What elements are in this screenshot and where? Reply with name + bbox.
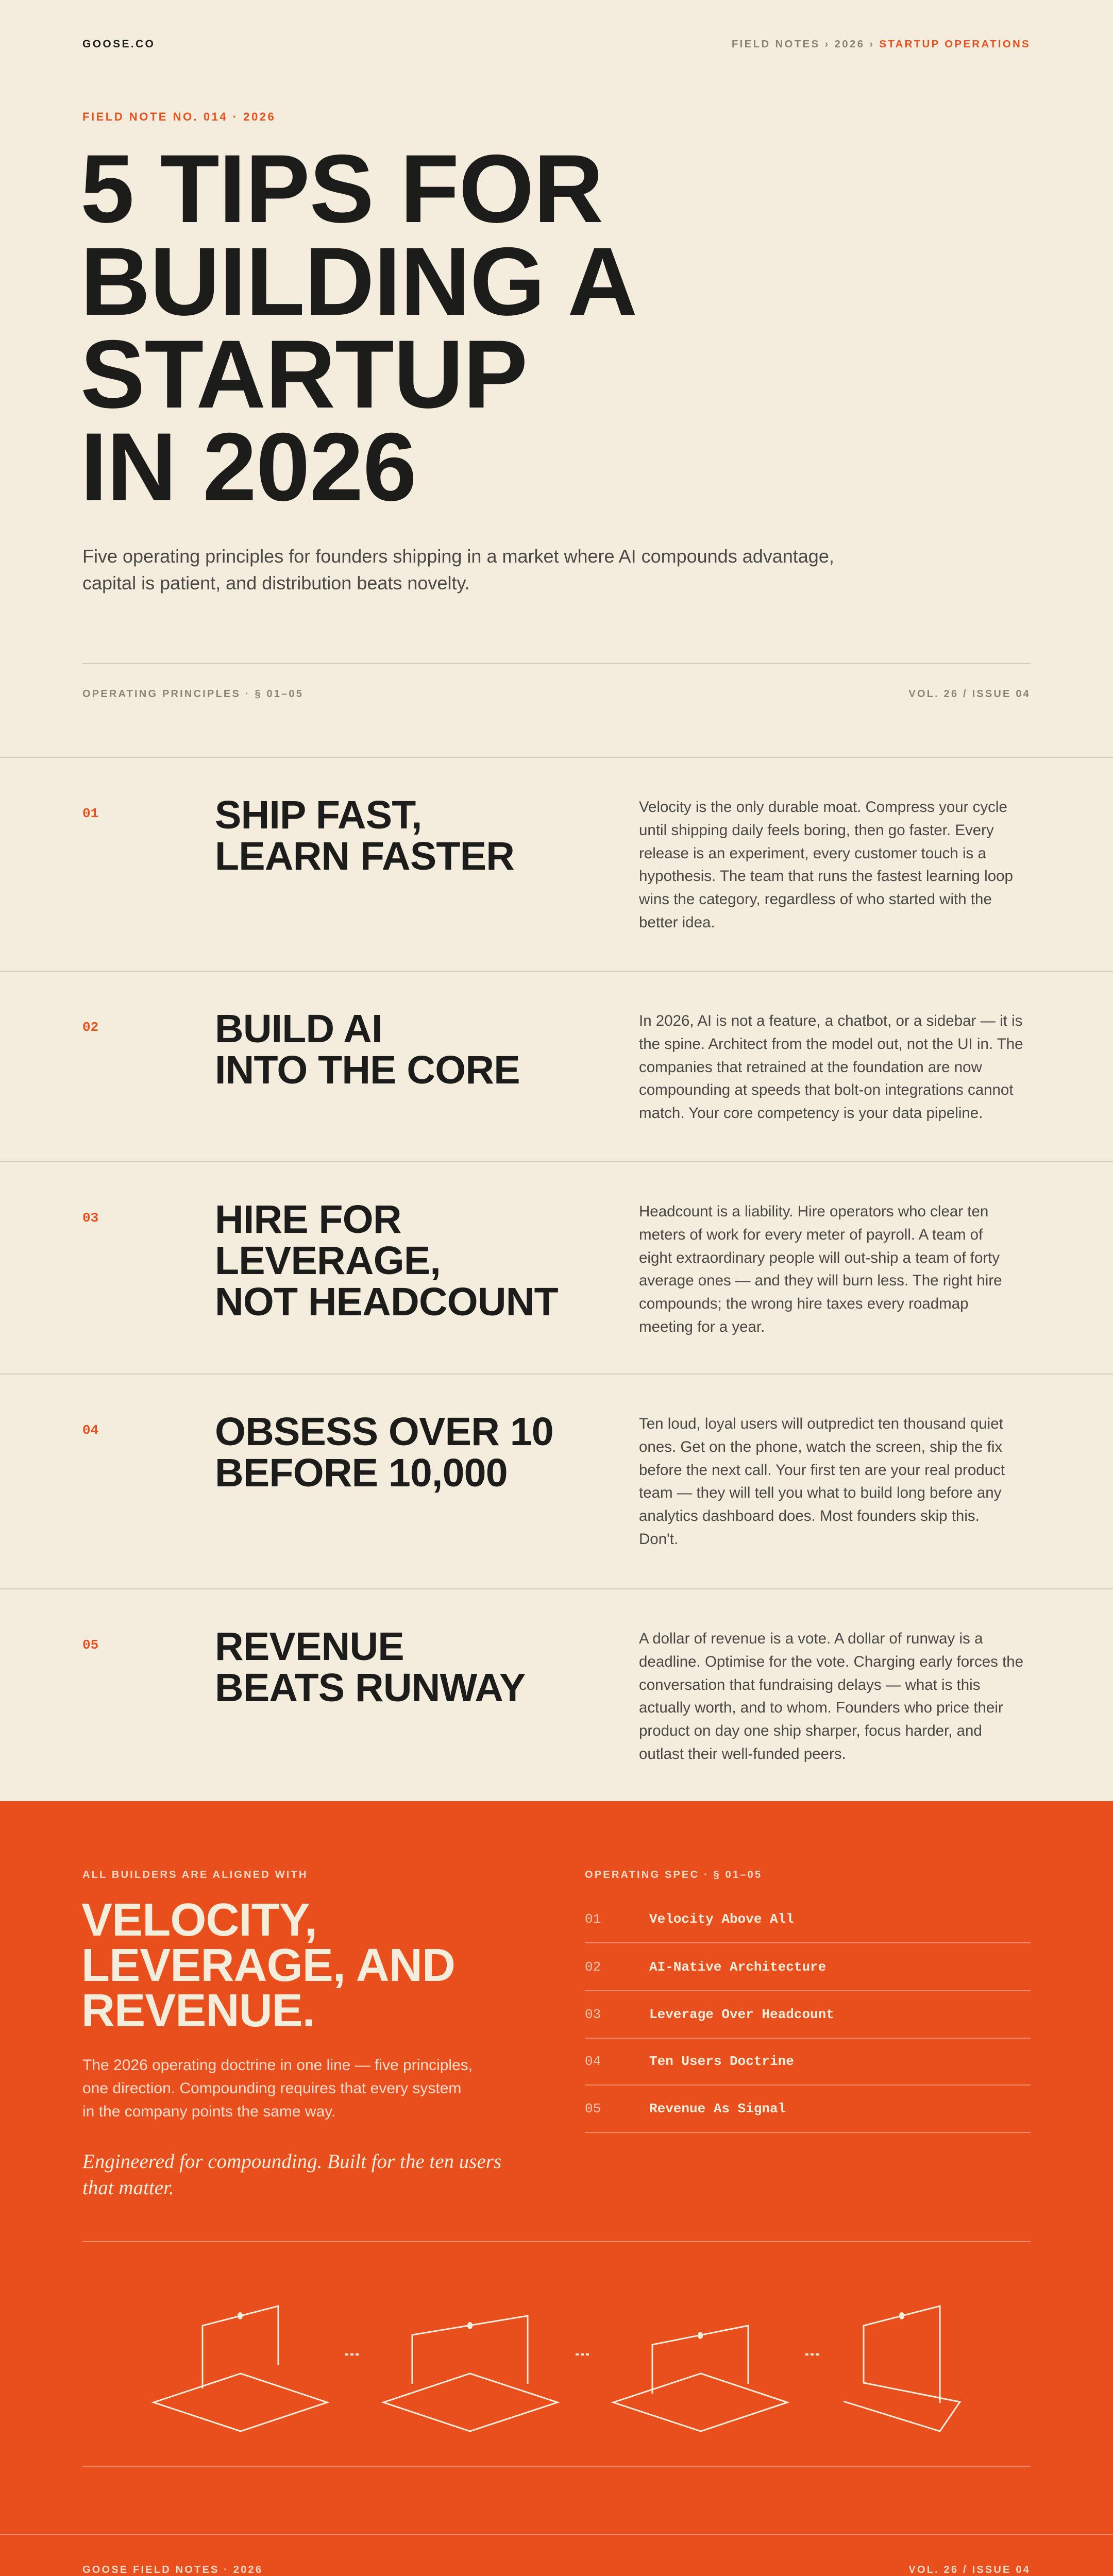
doctrine paragraph: The 2026 operating doctrine in one line — five principles, bbox=[82, 2057, 473, 2074]
number 01: 01 bbox=[82, 806, 98, 821]
body 02: compounding at speeds that bolt-on integrations cannot bbox=[639, 1081, 1014, 1098]
headline 03 bbox=[215, 1197, 558, 1324]
body 03: meters of work for every meter of payroll. A team of bbox=[639, 1226, 983, 1243]
number 03: 03 bbox=[82, 1210, 98, 1226]
spec 04: 04 bbox=[585, 2054, 601, 2069]
body 01: release is an experiment, every customer touch is a bbox=[639, 845, 986, 862]
title: IN 2026 bbox=[80, 413, 416, 521]
spec 02: 02 bbox=[585, 1959, 601, 1975]
spec 05: Revenue As Signal bbox=[649, 2101, 786, 2116]
body 01: hypothesis. The team that runs the fastest learning loop bbox=[639, 868, 1013, 885]
principle 04 bbox=[82, 1410, 1005, 1548]
headline 04 bbox=[215, 1410, 553, 1495]
body 01: wins the category, regardless of who started with the bbox=[639, 891, 992, 908]
principle 05 bbox=[82, 1624, 1023, 1762]
doctrine paragraph: in the company points the same way. bbox=[82, 2103, 335, 2120]
number 04: 04 bbox=[82, 1422, 98, 1438]
headline 01: LEARN FASTER bbox=[215, 834, 514, 878]
body 04: analytics dashboard does. Most founders skip this. bbox=[639, 1507, 980, 1524]
headline 01: SHIP FAST, bbox=[215, 793, 422, 837]
spec 01 bbox=[585, 1896, 1031, 1943]
eyebrow: all builders: ALL BUILDERS ARE ALIGNED WITH bbox=[82, 1869, 308, 1880]
spec 02: AI-Native Architecture bbox=[649, 1959, 826, 1975]
body 05: actually worth, and to whom. Founders who price their bbox=[639, 1699, 1003, 1716]
eyebrow: operating spec: OPERATING SPEC · § 01–05 bbox=[585, 1869, 762, 1880]
italic tagline: Engineered for compounding. Built for the ten users bbox=[82, 2150, 501, 2173]
eyebrow label: FIELD NOTE NO. 014 · 2026 bbox=[82, 110, 276, 123]
body 03: meeting for a year. bbox=[639, 1318, 765, 1335]
footer left: GOOSE FIELD NOTES · 2026 bbox=[82, 2564, 263, 2575]
panel figure 2 bbox=[383, 2316, 558, 2431]
spec 01: Velocity Above All bbox=[649, 1911, 794, 1927]
headline 02: BUILD AI bbox=[215, 1007, 382, 1051]
spec 05: 05 bbox=[585, 2101, 601, 2116]
body 02: companies that retrained at the foundation are now bbox=[639, 1059, 982, 1076]
panel: orange doctrine section bbox=[0, 1801, 1113, 2576]
headline 03: HIRE FOR bbox=[215, 1197, 401, 1242]
body 01: better idea. bbox=[639, 914, 715, 931]
body 03: Headcount is a liability. Hire operators who clear ten bbox=[639, 1203, 988, 1220]
title: 5 TIPS FOR bbox=[80, 134, 603, 243]
footer right: VOL. 26 / ISSUE 04 bbox=[908, 2564, 1031, 2575]
dots 2 bbox=[576, 2353, 589, 2355]
header: breadcrumb: FIELD NOTES › 2026 › STARTUP OPERATIONS bbox=[732, 38, 1031, 50]
principle 01 bbox=[82, 793, 1013, 931]
panel figure 3 bbox=[613, 2326, 787, 2431]
principle 02 bbox=[82, 1007, 1023, 1122]
doctrine paragraph bbox=[82, 2057, 473, 2120]
spec 03: Leverage Over Headcount bbox=[649, 2007, 834, 2022]
headline 02 bbox=[215, 1007, 520, 1092]
title: STARTUP bbox=[80, 320, 527, 428]
body 04 bbox=[639, 1415, 1005, 1548]
number 05: 05 bbox=[82, 1637, 98, 1653]
headline 02: INTO THE CORE bbox=[215, 1048, 520, 1092]
spec 03 bbox=[585, 1991, 1031, 2039]
doctrine paragraph: one direction. Compounding requires that every system bbox=[82, 2080, 461, 2097]
body 02: match. Your core competency is your data pipeline. bbox=[639, 1105, 983, 1122]
doctrine heading bbox=[81, 1894, 455, 2037]
body 04: before the next call. Your first ten are your real product bbox=[639, 1462, 1005, 1479]
headline 03: NOT HEADCOUNT bbox=[215, 1280, 558, 1324]
meta label left: OPERATING PRINCIPLES · § 01–05 bbox=[82, 688, 303, 700]
body 05 bbox=[639, 1630, 1023, 1762]
spec 02 bbox=[585, 1944, 1031, 1991]
body 01: until shipping daily feels boring, then go faster. Every bbox=[639, 822, 994, 839]
meta label right: VOL. 26 / ISSUE 04 bbox=[908, 688, 1031, 700]
headline 05: BEATS RUNWAY bbox=[215, 1666, 526, 1710]
body 04: team — they will tell you what to build long before any bbox=[639, 1484, 1001, 1501]
headline 01 bbox=[215, 793, 514, 878]
dots 1 bbox=[345, 2353, 359, 2355]
spec 04: Ten Users Doctrine bbox=[649, 2054, 794, 2069]
body 01 bbox=[639, 799, 1013, 931]
body 04: Ten loud, loyal users will outpredict ten thousand quiet bbox=[639, 1415, 1003, 1432]
body 04: Don't. bbox=[639, 1531, 678, 1548]
doctrine heading: LEVERAGE, AND bbox=[81, 1940, 455, 1991]
dots 3 bbox=[805, 2353, 819, 2355]
headline 04: BEFORE 10,000 bbox=[215, 1451, 508, 1495]
body 02: In 2026, AI is not a feature, a chatbot, or a sidebar — it is bbox=[639, 1012, 1022, 1029]
header: brand: GOOSE.CO bbox=[82, 38, 155, 50]
subtitle bbox=[82, 546, 834, 594]
headline 04: OBSESS OVER 10 bbox=[215, 1410, 553, 1454]
spec list bbox=[585, 1911, 1031, 2133]
spec 03: 03 bbox=[585, 2007, 601, 2022]
body 03 bbox=[639, 1203, 1002, 1335]
subtitle: Five operating principles for founders shipping in a market where AI compounds advantage, bbox=[82, 546, 834, 567]
body 05: outlast their well-funded peers. bbox=[639, 1745, 846, 1762]
italic tagline: that matter. bbox=[82, 2177, 174, 2199]
illustration: four folding panels bbox=[151, 2305, 962, 2432]
spec 01: 01 bbox=[585, 1911, 601, 1927]
italic tagline bbox=[82, 2150, 501, 2199]
headline 05: REVENUE bbox=[215, 1624, 404, 1669]
panel figure 1 bbox=[154, 2306, 327, 2431]
number 02: 02 bbox=[82, 1020, 98, 1035]
headline 03: LEVERAGE, bbox=[215, 1239, 441, 1283]
panel figure 4 bbox=[844, 2306, 960, 2431]
body 03: eight extraordinary people will out-ship a team of forty bbox=[639, 1249, 1000, 1266]
body 01: Velocity is the only durable moat. Compress your cycle bbox=[639, 799, 1007, 816]
title: BUILDING A bbox=[80, 227, 637, 335]
body 05: A dollar of revenue is a vote. A dollar of runway is a bbox=[639, 1630, 983, 1647]
body 04: ones. Get on the phone, watch the screen, ship the fix bbox=[639, 1438, 1002, 1455]
doctrine heading: VELOCITY, bbox=[81, 1894, 317, 1946]
title bbox=[80, 134, 637, 521]
body 05: conversation that fundraising delays — what is this bbox=[639, 1676, 980, 1693]
doctrine heading: REVENUE. bbox=[81, 1985, 315, 2037]
body 03: average ones — and they will burn less. The right hire bbox=[639, 1272, 1002, 1289]
body 05: product on day one ship sharper, focus harder, and bbox=[639, 1722, 982, 1739]
body 03: compounds; the wrong hire taxes every roadmap bbox=[639, 1295, 969, 1312]
spec 05 bbox=[585, 2086, 1031, 2133]
subtitle: capital is patient, and distribution beats novelty. bbox=[82, 572, 470, 594]
principle 03 bbox=[82, 1197, 1002, 1335]
body 05: deadline. Optimise for the vote. Charging early forces the bbox=[639, 1653, 1023, 1670]
headline 05 bbox=[215, 1624, 526, 1710]
body 02 bbox=[639, 1012, 1023, 1122]
body 02: the spine. Architect from the model out, not the UI in. The bbox=[639, 1036, 1023, 1053]
spec 04 bbox=[585, 2038, 1031, 2086]
